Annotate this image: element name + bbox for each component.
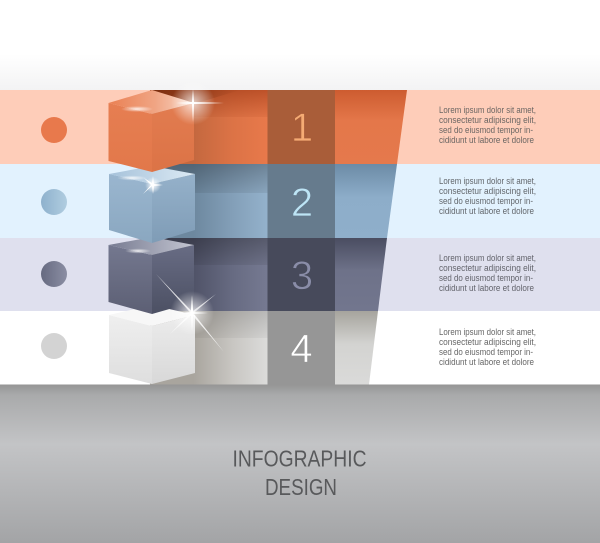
title: DESIGN: [265, 474, 337, 500]
number 1: 1: [291, 106, 313, 150]
centre column with numbers: [268, 90, 335, 384]
bar 2: blue: [150, 164, 397, 238]
text block 1: consectetur adipiscing elit,: [439, 115, 536, 125]
text block 4: consectetur adipiscing elit,: [439, 337, 536, 347]
text block 2: Lorem ipsum dolor sit amet,: [439, 176, 536, 186]
text block 1: [439, 105, 536, 145]
left circle marker 3: [41, 261, 67, 287]
white cube: [109, 305, 195, 384]
text block 4: [439, 327, 536, 367]
band 3 background: slate row: [0, 238, 600, 311]
slate cube: [108, 237, 194, 314]
sparkle on slate and white cubes: [156, 274, 224, 352]
floor background: [0, 384, 600, 543]
text block 2: cididunt ut labore et dolore: [439, 206, 534, 216]
text block 3: Lorem ipsum dolor sit amet,: [439, 253, 536, 263]
column segment 3: [268, 238, 335, 311]
text block 1: Lorem ipsum dolor sit amet,: [439, 105, 536, 115]
title: INFOGRAPHIC: [232, 446, 366, 472]
text block 4: Lorem ipsum dolor sit amet,: [439, 327, 536, 337]
band 1 background: orange row: [0, 90, 600, 164]
left circle marker 4: [41, 333, 67, 359]
top background: [0, 0, 600, 90]
text block 4: sed do eiusmod tempor in-: [439, 347, 533, 357]
text block 2: [439, 176, 536, 216]
text block 4: cididunt ut labore et dolore: [439, 357, 534, 367]
text block 2: consectetur adipiscing elit,: [439, 186, 536, 196]
text block 3: sed do eiusmod tempor in-: [439, 273, 533, 283]
text block 1: sed do eiusmod tempor in-: [439, 125, 533, 135]
sparkle on blue cube: [143, 176, 163, 194]
left circle marker 2: [41, 189, 67, 215]
text block 3: cididunt ut labore et dolore: [439, 283, 534, 293]
sparkle on orange cube: [171, 81, 224, 125]
column segment 4: [268, 311, 335, 384]
band 2 background: blue row: [0, 164, 600, 238]
text block 2: sed do eiusmod tempor in-: [439, 196, 533, 206]
title: [232, 446, 366, 500]
column segment 1: [268, 90, 335, 164]
bar 4: light grey: [150, 311, 378, 384]
bar 1: orange: [150, 90, 407, 164]
text block 1: cididunt ut labore et dolore: [439, 135, 534, 145]
text block 3: [439, 253, 536, 293]
bar 3: slate: [150, 238, 387, 311]
number 4: 4: [290, 327, 313, 371]
text block 3: consectetur adipiscing elit,: [439, 263, 536, 273]
orange cube: [108, 90, 194, 172]
number 2: 2: [291, 181, 313, 225]
left circle marker 1: [41, 117, 67, 143]
band 4 background: white row: [0, 311, 600, 384]
number 3: 3: [291, 254, 313, 298]
column segment 2: [268, 164, 335, 238]
blue cube: [109, 166, 195, 243]
